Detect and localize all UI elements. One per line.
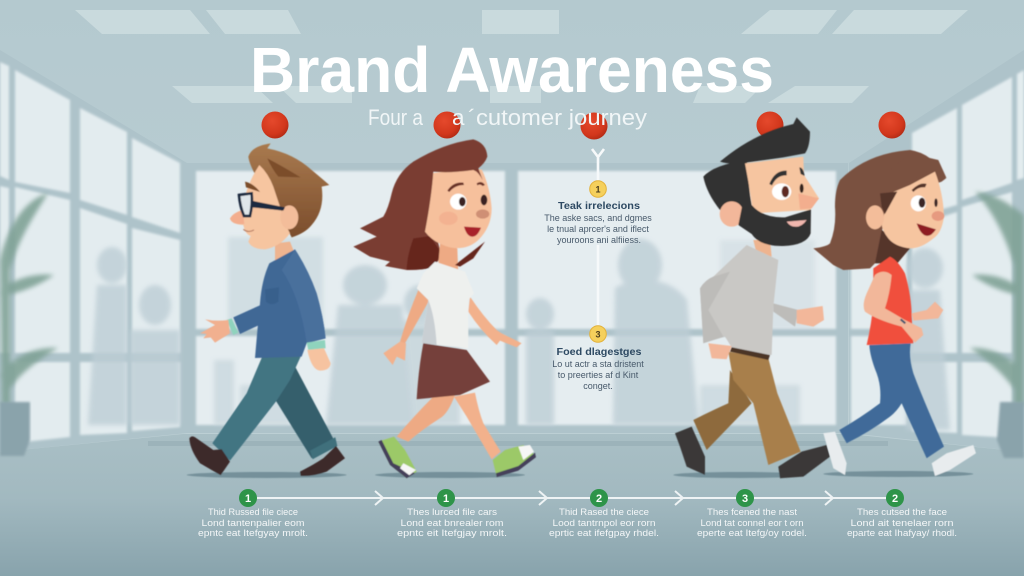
- eye: [772, 183, 791, 200]
- beard: [738, 180, 811, 246]
- caption 1: Thid Russed file ciece: [208, 507, 298, 517]
- note 2 body: [552, 359, 644, 391]
- hands: [200, 319, 230, 343]
- left side wall: [0, 50, 187, 452]
- center timeline: [544, 149, 652, 391]
- note 2 body: Lo ut actr a sta dristent: [552, 359, 644, 369]
- note 1 body: The aske sacs, and dgmes: [544, 213, 652, 223]
- shirt: [255, 249, 326, 358]
- caption 4: Thes fcened the nast: [707, 507, 798, 517]
- eye: [911, 195, 926, 211]
- jeans: [839, 343, 944, 458]
- hair right piece: [455, 242, 485, 267]
- caption 5: Thes cutsed the face: [857, 507, 947, 517]
- face: [230, 165, 290, 249]
- far arm: [912, 302, 943, 321]
- face: [419, 169, 492, 248]
- cuffs: [227, 318, 238, 335]
- back leg: [693, 370, 752, 450]
- hair fringe: [267, 158, 301, 177]
- step captions: [198, 507, 957, 538]
- front leg: [212, 354, 301, 461]
- left shoe: [378, 437, 417, 478]
- caption 2: Thes lurced file cars: [407, 507, 498, 517]
- note 1 body: youroons ani alfiiess.: [557, 235, 641, 245]
- ear: [720, 201, 744, 227]
- note 2 heading: Foed dlagestges: [556, 346, 642, 358]
- cheek: [439, 212, 458, 225]
- legs: [397, 395, 455, 442]
- mouth: [243, 229, 254, 232]
- neck: [753, 240, 772, 257]
- caption 5: Lond ait tenelaer rorn: [850, 518, 954, 528]
- character: girl in white shirt: [353, 139, 536, 478]
- caption 5: [847, 507, 957, 538]
- caption 1: [198, 507, 308, 538]
- hair top: [720, 117, 810, 164]
- mouth: [917, 223, 936, 236]
- subtitle: ´cutomer journey: [468, 105, 648, 130]
- eyebrows: [912, 183, 927, 192]
- neck: [438, 243, 458, 275]
- right side wall: [849, 50, 1024, 452]
- shoes: [823, 432, 847, 475]
- red balls: [262, 112, 906, 140]
- right shoe: [493, 445, 535, 477]
- front shoe: [778, 445, 830, 478]
- hands: [797, 306, 824, 327]
- eyebrows: [769, 171, 787, 185]
- neck: [275, 242, 297, 265]
- hair back: [353, 162, 442, 270]
- mouth: [787, 220, 807, 227]
- caption 4: [697, 507, 807, 538]
- eyes: [450, 194, 467, 210]
- nose: [476, 209, 489, 219]
- side window panes: [0, 62, 1024, 443]
- plants: [0, 192, 1024, 405]
- vertical connector: [592, 149, 604, 325]
- back wall band: [183, 163, 848, 433]
- yellow badge 1: [590, 181, 606, 197]
- caption 3: Thid Rased the ciece: [559, 507, 649, 517]
- title: Brand Awareness: [250, 34, 774, 106]
- subtitle: Four a: [368, 105, 423, 130]
- caption 1: Lond tantenpalier eom: [202, 518, 304, 528]
- floor: [0, 434, 1024, 576]
- hair top: [412, 139, 487, 236]
- back leg: [273, 363, 337, 458]
- bottom arrows: [257, 491, 886, 505]
- right arm: [468, 297, 522, 347]
- top: [867, 257, 913, 345]
- face: [745, 157, 819, 213]
- caption 5: eparte eat Ihafyay/ rhodl.: [847, 528, 957, 538]
- ear: [280, 205, 298, 229]
- note 1 heading: Teak irrelecions: [558, 200, 640, 212]
- character: man with glasses: [187, 143, 347, 478]
- step badges: 1: [443, 493, 449, 505]
- caption 3: [549, 507, 659, 538]
- nose: [932, 211, 944, 221]
- note 1 body: le tnual aprcer's and iflect: [547, 224, 649, 234]
- hair back: [813, 150, 946, 270]
- yellow badge 2: [590, 326, 606, 342]
- step badges: 2: [892, 493, 898, 505]
- character: girl in red top: [813, 150, 976, 477]
- ceiling lights: [75, 10, 968, 103]
- glasses: [239, 193, 252, 216]
- caption 1: epntc eat Itefgyay mrolt.: [198, 528, 308, 538]
- note 2 body: to preerties af d Kint: [558, 370, 639, 380]
- eyebrows: [447, 183, 464, 192]
- caption 2: [397, 507, 507, 538]
- shoes: [189, 436, 230, 475]
- near arm: [864, 272, 923, 343]
- hair: [248, 143, 329, 237]
- subtitle: a: [452, 105, 465, 130]
- step badges: 3: [742, 493, 748, 505]
- caption 4: eperte eat Itefg/oy rodel.: [697, 528, 807, 538]
- yellow badge 1: 1: [595, 184, 601, 194]
- yellow badge 2: 3: [595, 330, 601, 340]
- step badges: [239, 489, 904, 507]
- note 2 body: conget.: [583, 381, 613, 391]
- subtitle: [368, 105, 648, 130]
- ear: [866, 205, 884, 229]
- face: [882, 172, 944, 248]
- sleeve: [773, 303, 798, 327]
- back shoe: [675, 427, 705, 475]
- caption 4: Lond tat connel eor t orn: [700, 518, 804, 528]
- shirt: [417, 262, 474, 348]
- eyebrow: [245, 182, 260, 192]
- bracelet: [901, 319, 905, 323]
- shirt: [700, 245, 778, 355]
- step badges: 1: [245, 493, 251, 505]
- mouth: [464, 227, 481, 237]
- left arm: [400, 290, 429, 343]
- fringe: [882, 153, 947, 193]
- character: bearded man: [673, 117, 830, 478]
- caption 2: epntc eit Itefgjay mrolt.: [397, 528, 507, 538]
- back wall panes: [196, 171, 836, 425]
- belt: [730, 347, 770, 360]
- step badges: 2: [596, 493, 602, 505]
- front leg: [728, 352, 801, 465]
- caption 2: Lond eat bnrealer rom: [400, 518, 504, 528]
- blurred silhouettes of colleagues: [88, 237, 950, 430]
- hair side: [703, 160, 752, 213]
- skirt: [417, 343, 490, 399]
- caption 3: Lood tantrnpol eor rorn: [552, 518, 656, 528]
- note 1 body: [544, 213, 652, 245]
- caption 3: eprtic eat ifefgpay rhdel.: [549, 528, 659, 538]
